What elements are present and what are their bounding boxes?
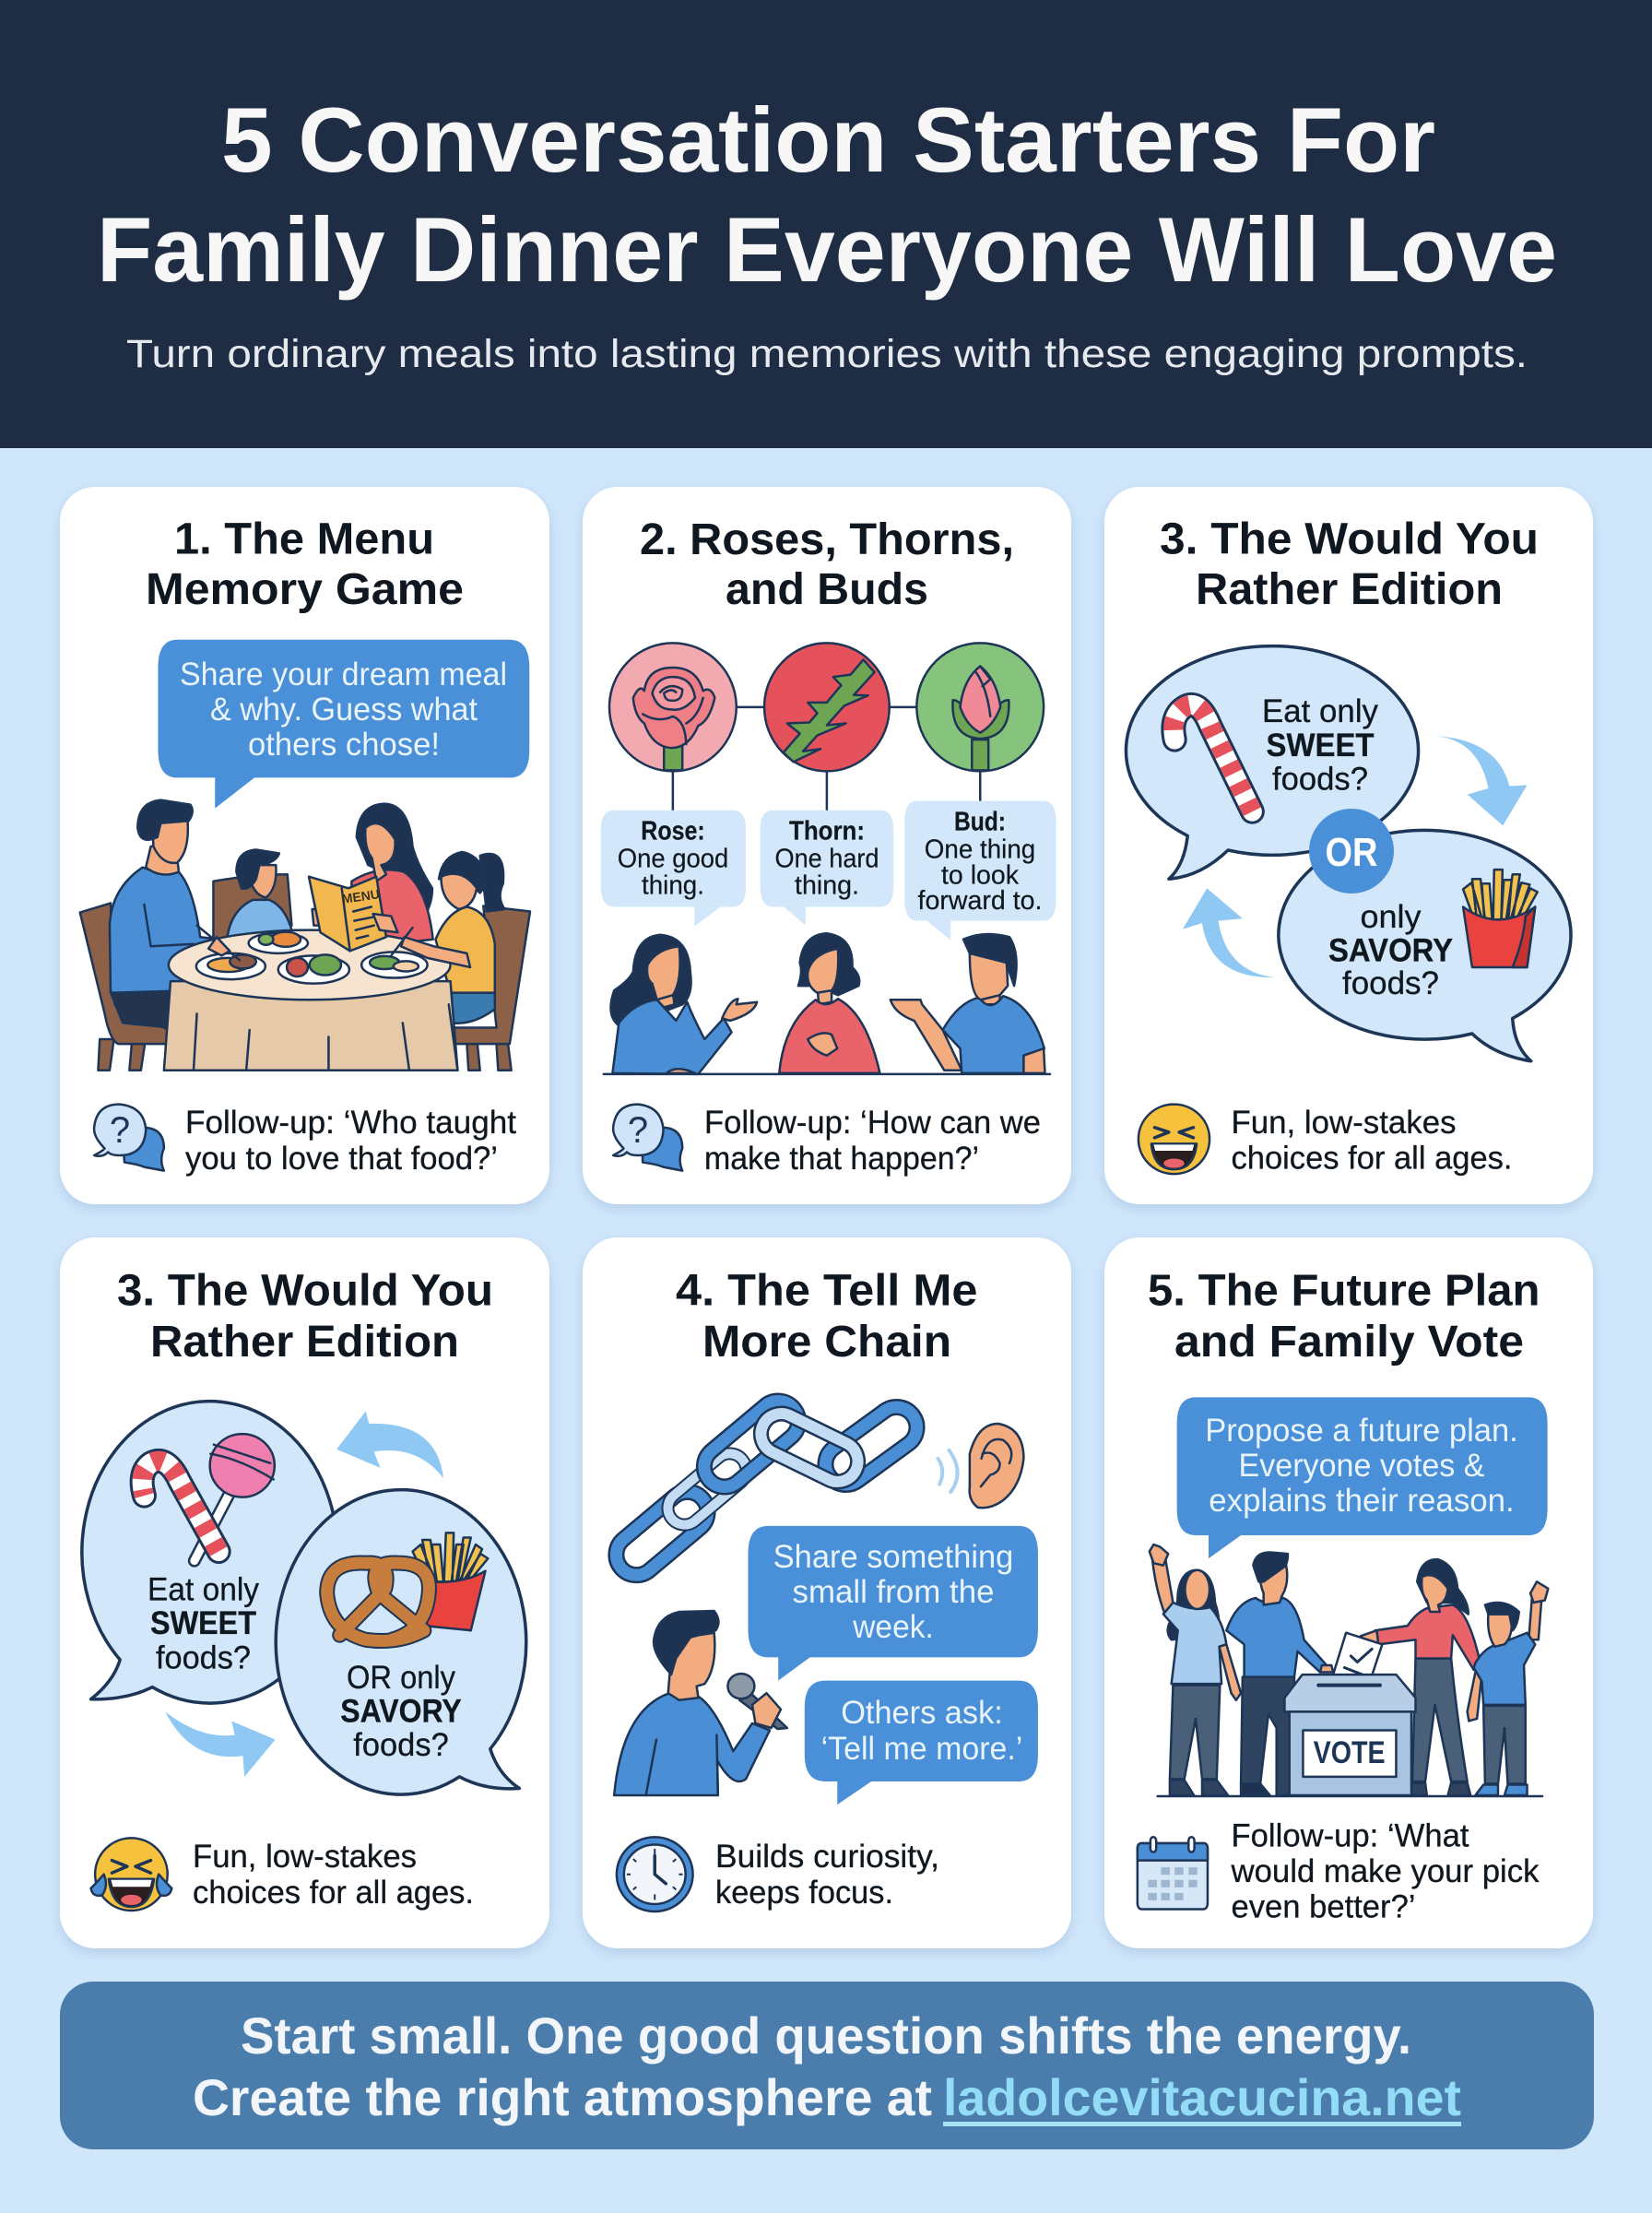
speech bubble: share [748,1526,1038,1681]
icon: bud [916,643,1044,771]
panel: 5. The Future Plan and Family Vote [1104,1237,1593,1948]
icon: laughing emoji [1139,1105,1210,1174]
footer text: Start small. One good question shifts the energy. [241,2006,1411,2065]
speech bubble: share: Share something [773,1539,1013,1575]
callout: rose: thing. [642,870,704,900]
woman [1361,1559,1481,1795]
icon: ear with sound waves [938,1424,1023,1508]
panel: 4. The Tell Me More Chain [583,1237,1071,1948]
title [97,89,1557,301]
speech bubble: Share your dream meal [180,657,507,692]
heading: 4. The Tell Me [676,1267,977,1315]
callout: thorn: Thorn: [789,817,865,846]
callout: bud: One thing [925,835,1035,865]
diagram: rose thorn bud circles [609,643,1044,811]
speech bubble: savory: foods? [1342,965,1439,1001]
caption: choices for all ages. [193,1875,474,1911]
heading: 5. The Future Plan [1148,1267,1540,1315]
caption: Fun, low-stakes [1232,1105,1457,1141]
caption [1232,1105,1512,1177]
heading: Memory Game [146,565,464,614]
speech bubble: savory: only [1361,899,1422,935]
callout: bud: forward to. [918,886,1042,916]
caption: keeps focus. [715,1875,893,1911]
menu label: MENU [341,886,381,906]
heading: More Chain [702,1318,951,1367]
speech bubble: others ask: Others ask: [841,1695,1003,1731]
speech bubble [1177,1397,1548,1558]
callout: rose [601,811,746,927]
arrows [165,1411,443,1777]
header banner [0,0,1652,448]
illustration: family voting at ballot box [1150,1544,1548,1796]
speech bubble: share: small from the [793,1574,994,1610]
speech bubble: savory: SAVORY [1328,933,1453,968]
footer link: ladolcevitacucina.net [943,2068,1461,2126]
follow-up text [704,1105,1041,1177]
icon: question bubbles: ? [110,1110,130,1151]
heading: 3. The Would You [1160,515,1539,564]
caption: Fun, low-stakes [193,1839,417,1875]
speech bubble: Propose a future plan. [1205,1413,1518,1449]
icon: candy cane [142,1461,218,1552]
follow-up text: you to love that food?’ [185,1141,498,1177]
caption: choices for all ages. [1232,1140,1512,1177]
speech bubble: explains their reason. [1209,1483,1515,1519]
callout: thorn: thing. [795,870,859,900]
icon: lollipop [195,1434,275,1561]
girl with raised hand [1150,1544,1241,1795]
icon: question bubbles [613,1105,682,1171]
footer text [193,2006,1411,2126]
speech bubble: savory: foods? [353,1727,449,1763]
heading [676,1267,977,1367]
heading [117,1267,493,1367]
speech bubble: sweet: Eat only [148,1571,259,1608]
speech bubble: sweet [82,1402,337,1703]
illustration: three people talking [604,933,1050,1074]
heading: 3. The Would You [117,1267,493,1315]
heading: Rather Edition [1196,565,1503,614]
VOTE label: VOTE [1314,1735,1386,1770]
callout: bud: Bud: [954,808,1006,837]
speech bubble: & why. Guess what [210,692,478,728]
caption [193,1839,474,1911]
icon: fries [1463,870,1538,967]
callout: bud: to look [941,861,1019,891]
icon: candy cane [1174,704,1252,811]
heading [640,515,1014,614]
follow-up text [185,1105,516,1177]
OR badge: OR [1326,830,1377,875]
follow-up text: Follow-up: ‘What [1232,1818,1469,1853]
follow-up text: even better?’ [1232,1888,1416,1925]
speech bubble: savory [1279,830,1571,1061]
icon: fries [413,1533,488,1630]
speech bubble: sweet: foods? [1272,762,1368,797]
speech bubble: savory: SAVORY [340,1693,462,1730]
icon: clock [617,1837,693,1911]
illustration: person with microphone [614,1611,787,1795]
footer banner [60,1982,1594,2149]
speech bubble: Everyone votes & [1239,1448,1484,1484]
follow-up text: Follow-up: ‘How can we [704,1105,1041,1141]
icon: rose [609,643,737,771]
heading: 2. Roses, Thorns, [640,515,1014,564]
arrows [1183,736,1528,977]
panel: 1. The Menu Memory Game [60,487,549,1204]
OR badge [1309,809,1394,893]
heading [1148,1267,1540,1367]
callout: rose: One good [618,845,728,874]
icon: pretzel [327,1563,429,1641]
title: 5 Conversation Starters For [221,89,1435,191]
speech bubble [158,640,529,809]
illustration: family at dinner table [80,800,530,1071]
icon: crying-laughing emoji [91,1838,171,1911]
callout: thorn [761,811,893,926]
callout: thorn: One hard [774,845,879,874]
speech bubble: sweet: SWEET [150,1605,256,1641]
panel: 3. Would You Rather, top row [1104,487,1593,1204]
ballot box [1284,1675,1416,1711]
callout: bud [904,801,1056,941]
speech bubble: savory [276,1490,526,1794]
boy with raised hand [1468,1581,1548,1795]
speech bubble: sweet: Eat only [1262,693,1378,729]
speech bubble: sweet: SWEET [1267,728,1374,763]
callout: rose: Rose: [641,817,705,846]
icon: chain [608,1393,925,1583]
ballot paper [1330,1633,1382,1686]
follow-up text: make that happen?’ [704,1141,979,1177]
panel: 3. Would You Rather, bottom row [60,1237,549,1948]
speech bubble: others ask [805,1681,1038,1805]
icon: question bubbles [94,1105,164,1171]
caption: Builds curiosity, [715,1839,939,1875]
icon: question bubbles: ? [628,1110,648,1151]
heading [146,515,464,614]
speech bubble: savory: OR only [347,1660,455,1696]
heading: 1. The Menu [174,515,434,564]
speech bubble: others ask: ‘Tell me more.’ [821,1731,1022,1767]
follow-up text: would make your pick [1231,1853,1540,1889]
panel: 2. Roses, Thorns, and Buds [583,487,1071,1204]
speech bubble: sweet [1126,646,1419,879]
heading [1160,515,1539,614]
heading: Rather Edition [150,1318,459,1367]
heading: and Buds [726,565,928,614]
title: Family Dinner Everyone Will Love [97,198,1557,301]
follow-up text [1231,1818,1540,1925]
follow-up text: Follow-up: ‘Who taught [185,1105,516,1141]
caption [715,1839,939,1911]
heading: and Family Vote [1174,1318,1524,1367]
speech bubble: sweet: foods? [156,1639,251,1676]
footer text: Create the right atmosphere at [193,2068,932,2126]
speech bubble: share: week. [852,1609,934,1645]
icon: calendar [1138,1837,1208,1909]
man [1226,1553,1333,1795]
subtitle: Turn ordinary meals into lasting memories with these engaging prompts. [126,332,1528,376]
speech bubble: others chose! [248,727,440,763]
icon: thorn [764,643,890,771]
